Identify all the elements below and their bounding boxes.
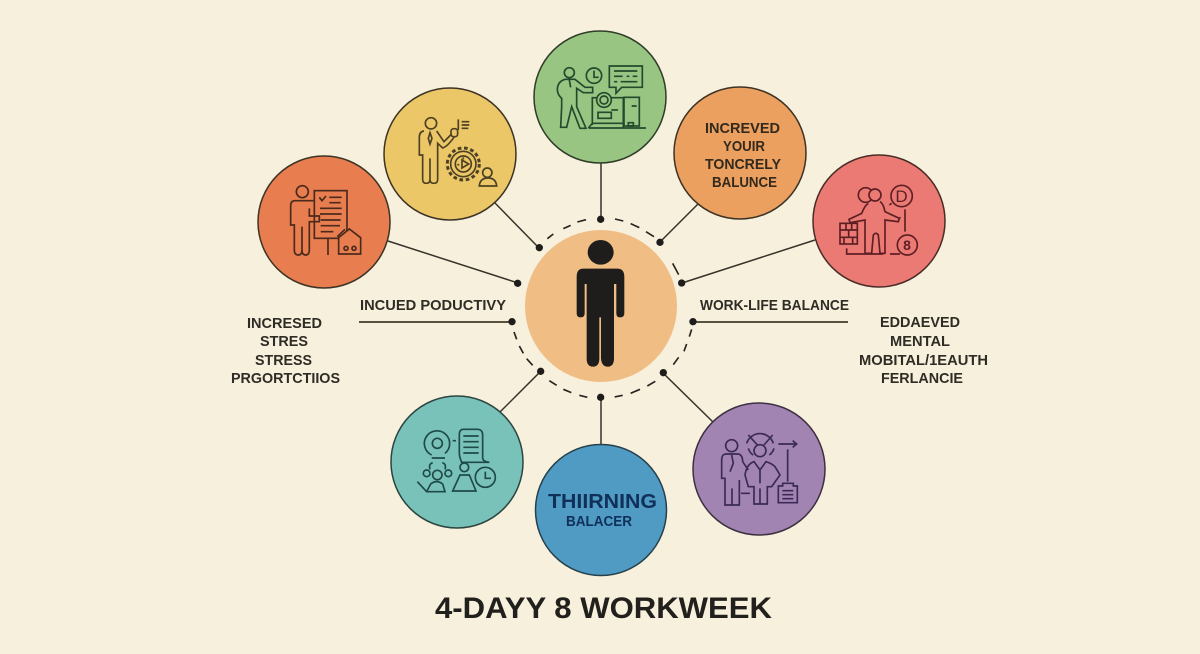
circle label: BALUNCE	[712, 174, 777, 191]
circle label: BALACER	[566, 514, 632, 530]
panel: orange circle	[258, 156, 390, 288]
icon letter: D: D	[895, 187, 908, 206]
panel: blue circle with text	[536, 444, 666, 576]
circle label: TONCRELY	[705, 156, 781, 173]
circle label: YOUIR	[723, 138, 765, 155]
text block: right mental health: MOBITAL/1EAUTH	[859, 352, 988, 369]
label: left productivity: INCUED PODUCTIVY	[360, 297, 506, 314]
panel: light orange circle with text	[674, 87, 806, 219]
panel: red circle	[813, 155, 945, 287]
icon: team with document and clock	[417, 429, 495, 492]
text block: right mental health: MENTAL	[890, 333, 950, 350]
icon: presenter with machine and speech bubble	[557, 66, 646, 128]
text block: left stress: INCRESED	[247, 315, 322, 332]
circle label	[548, 491, 657, 530]
icon: person with checklist and house	[291, 186, 361, 255]
title: 4-DAYY 8 WORKWEEK	[435, 592, 772, 625]
panel: green circle	[534, 31, 666, 163]
panel: purple circle	[693, 403, 825, 535]
dashed ring with connector dots	[508, 216, 697, 401]
text block: left stress: STRESS	[255, 352, 312, 369]
icon: central person	[577, 240, 624, 367]
text block: right mental health	[859, 314, 988, 387]
circle label	[705, 120, 781, 191]
panel: yellow circle	[384, 88, 516, 220]
icon digit: 8: 8	[903, 237, 911, 253]
circle label: THIIRNING	[548, 491, 657, 513]
icon: person with gear	[419, 118, 497, 186]
connector lines	[359, 163, 848, 445]
text block: left stress	[231, 315, 340, 387]
text block: left stress: PRGORTCTIIOS	[231, 370, 340, 387]
label: right work-life balance: WORK-LIFE BALANCE	[700, 297, 849, 314]
panel: teal circle	[391, 396, 523, 528]
icon: person with bricks and coins	[840, 185, 917, 255]
center hub with person	[525, 230, 677, 382]
icon: two business people with document	[722, 434, 797, 505]
text block: right mental health: EDDAEVED	[880, 314, 960, 331]
circle label: INCREVED	[705, 120, 780, 137]
text block: left stress: STRES	[260, 333, 308, 350]
text block: right mental health: FERLANCIE	[881, 370, 963, 387]
